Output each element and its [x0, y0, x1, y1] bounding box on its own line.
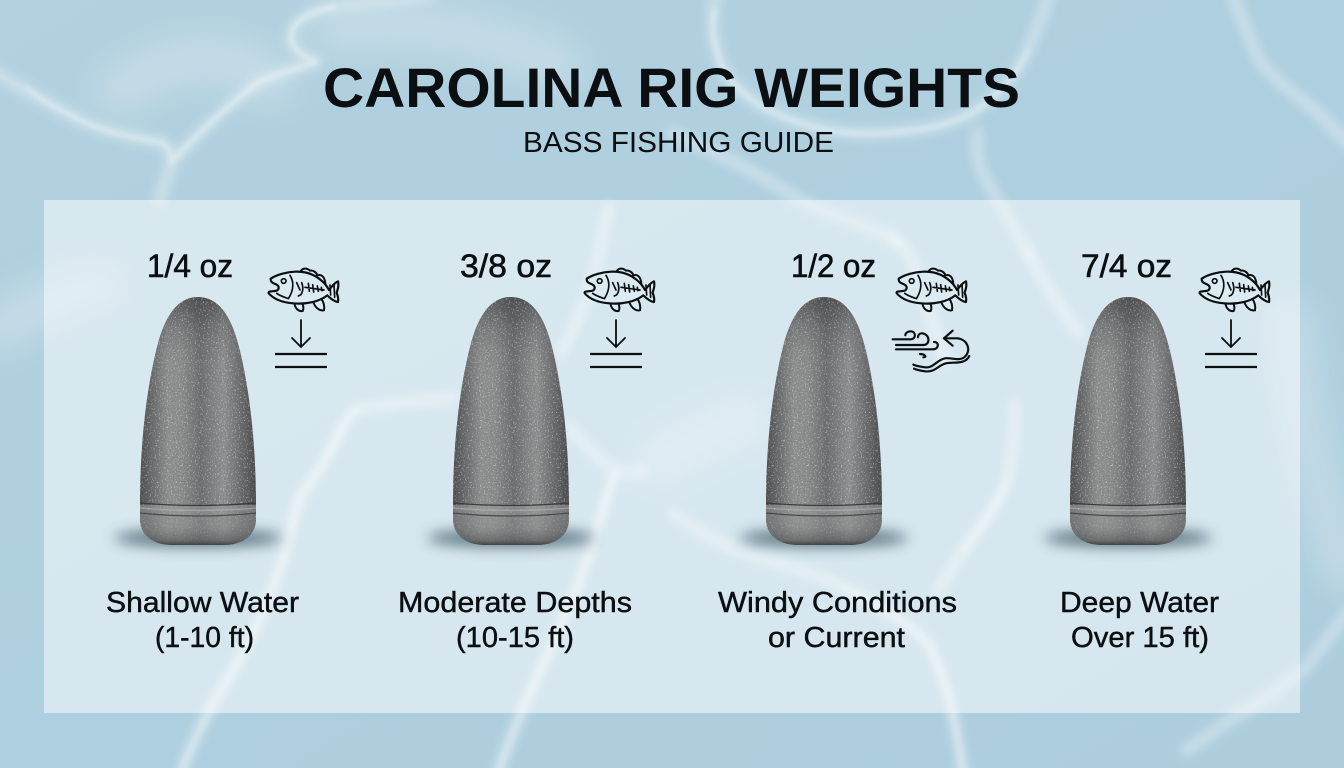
column: 3/8 oz moderate depths: [398, 248, 654, 654]
icon: depth arrow and water lines: [275, 320, 327, 367]
column: 1/4 oz shallow water: [106, 248, 338, 654]
icon: wind and current: [893, 331, 969, 371]
weight label 3/8 oz: 3/8 oz: [460, 248, 552, 284]
caustic lines over panel: [180, 207, 1079, 768]
caption: shallow water: (1-10 ft): [155, 622, 254, 654]
caption: windy conditions: or Current: [768, 622, 905, 654]
icon: fish: [585, 269, 654, 311]
icon: depth arrow and water lines: [590, 320, 642, 367]
caption: moderate depths: Moderate Depths: [398, 587, 632, 619]
subtitle: BASS FISHING GUIDE: [523, 127, 834, 159]
caption: shallow water: Shallow Water: [106, 587, 299, 619]
bullet sinker 1/2 oz: [740, 297, 908, 547]
icon: depth arrow and water lines: [1205, 320, 1257, 367]
weight label 1/4 oz: 1/4 oz: [147, 248, 233, 284]
caption: deep water: Deep Water: [1060, 587, 1219, 619]
panel: [44, 200, 1300, 713]
title: CAROLINA RIG WEIGHTS: [323, 56, 1020, 119]
bullet sinker 1/4 oz: [114, 297, 282, 547]
weight label 7/4 oz: 7/4 oz: [1081, 248, 1172, 284]
bullet sinker 3/8 oz: [427, 297, 595, 547]
caption: deep water: Over 15 ft): [1071, 622, 1209, 654]
icon: fish: [269, 269, 338, 311]
icon: fish: [897, 269, 966, 311]
bullet sinker 7/4 oz: [1044, 297, 1212, 547]
column: 7/4 oz deep water: [1044, 248, 1269, 654]
weight label 1/2 oz: 1/2 oz: [791, 248, 876, 284]
caption: moderate depths: (10-15 ft): [456, 622, 574, 654]
caption: windy conditions: Windy Conditions: [718, 587, 957, 619]
icon: fish: [1200, 269, 1269, 311]
column: 1/2 oz windy conditions: [718, 248, 969, 654]
